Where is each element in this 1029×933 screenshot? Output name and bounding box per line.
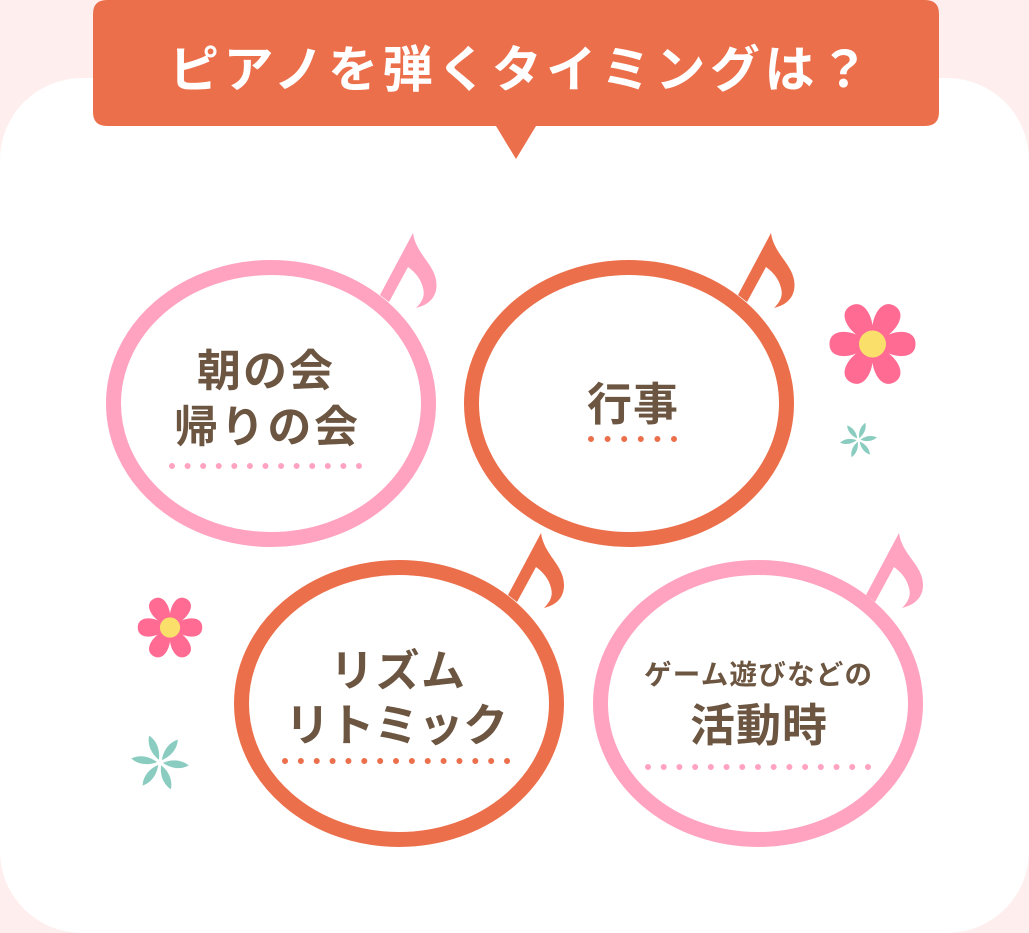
title banner bbox=[93, 0, 939, 159]
bubble: morning and closing meetings bbox=[114, 233, 436, 540]
bubble: rhythm and eurhythmics: リトミック bbox=[285, 700, 508, 751]
bubble: morning and closing meetings: 朝の会 bbox=[197, 347, 333, 396]
icon: large teal sparkle bbox=[131, 734, 189, 791]
bubble: school events bbox=[472, 233, 794, 540]
icon: small teal sparkle bbox=[836, 418, 881, 462]
icon: small pink flower bbox=[138, 594, 202, 661]
bubble: rhythm and eurhythmics bbox=[242, 533, 564, 840]
title banner: ピアノを弾くタイミングは？ bbox=[169, 42, 869, 98]
icon: large pink flower bbox=[830, 300, 916, 388]
bubble: activities such as games: 活動時 bbox=[690, 700, 827, 751]
bubble: rhythm and eurhythmics: リズム bbox=[330, 647, 465, 696]
bubble: school events: 行事 bbox=[587, 379, 678, 430]
bubble: morning and closing meetings: 帰りの会 bbox=[174, 403, 358, 452]
bubble: activities such as games bbox=[600, 533, 923, 840]
bubble: activities such as games: ゲーム遊びなどの bbox=[644, 659, 872, 690]
